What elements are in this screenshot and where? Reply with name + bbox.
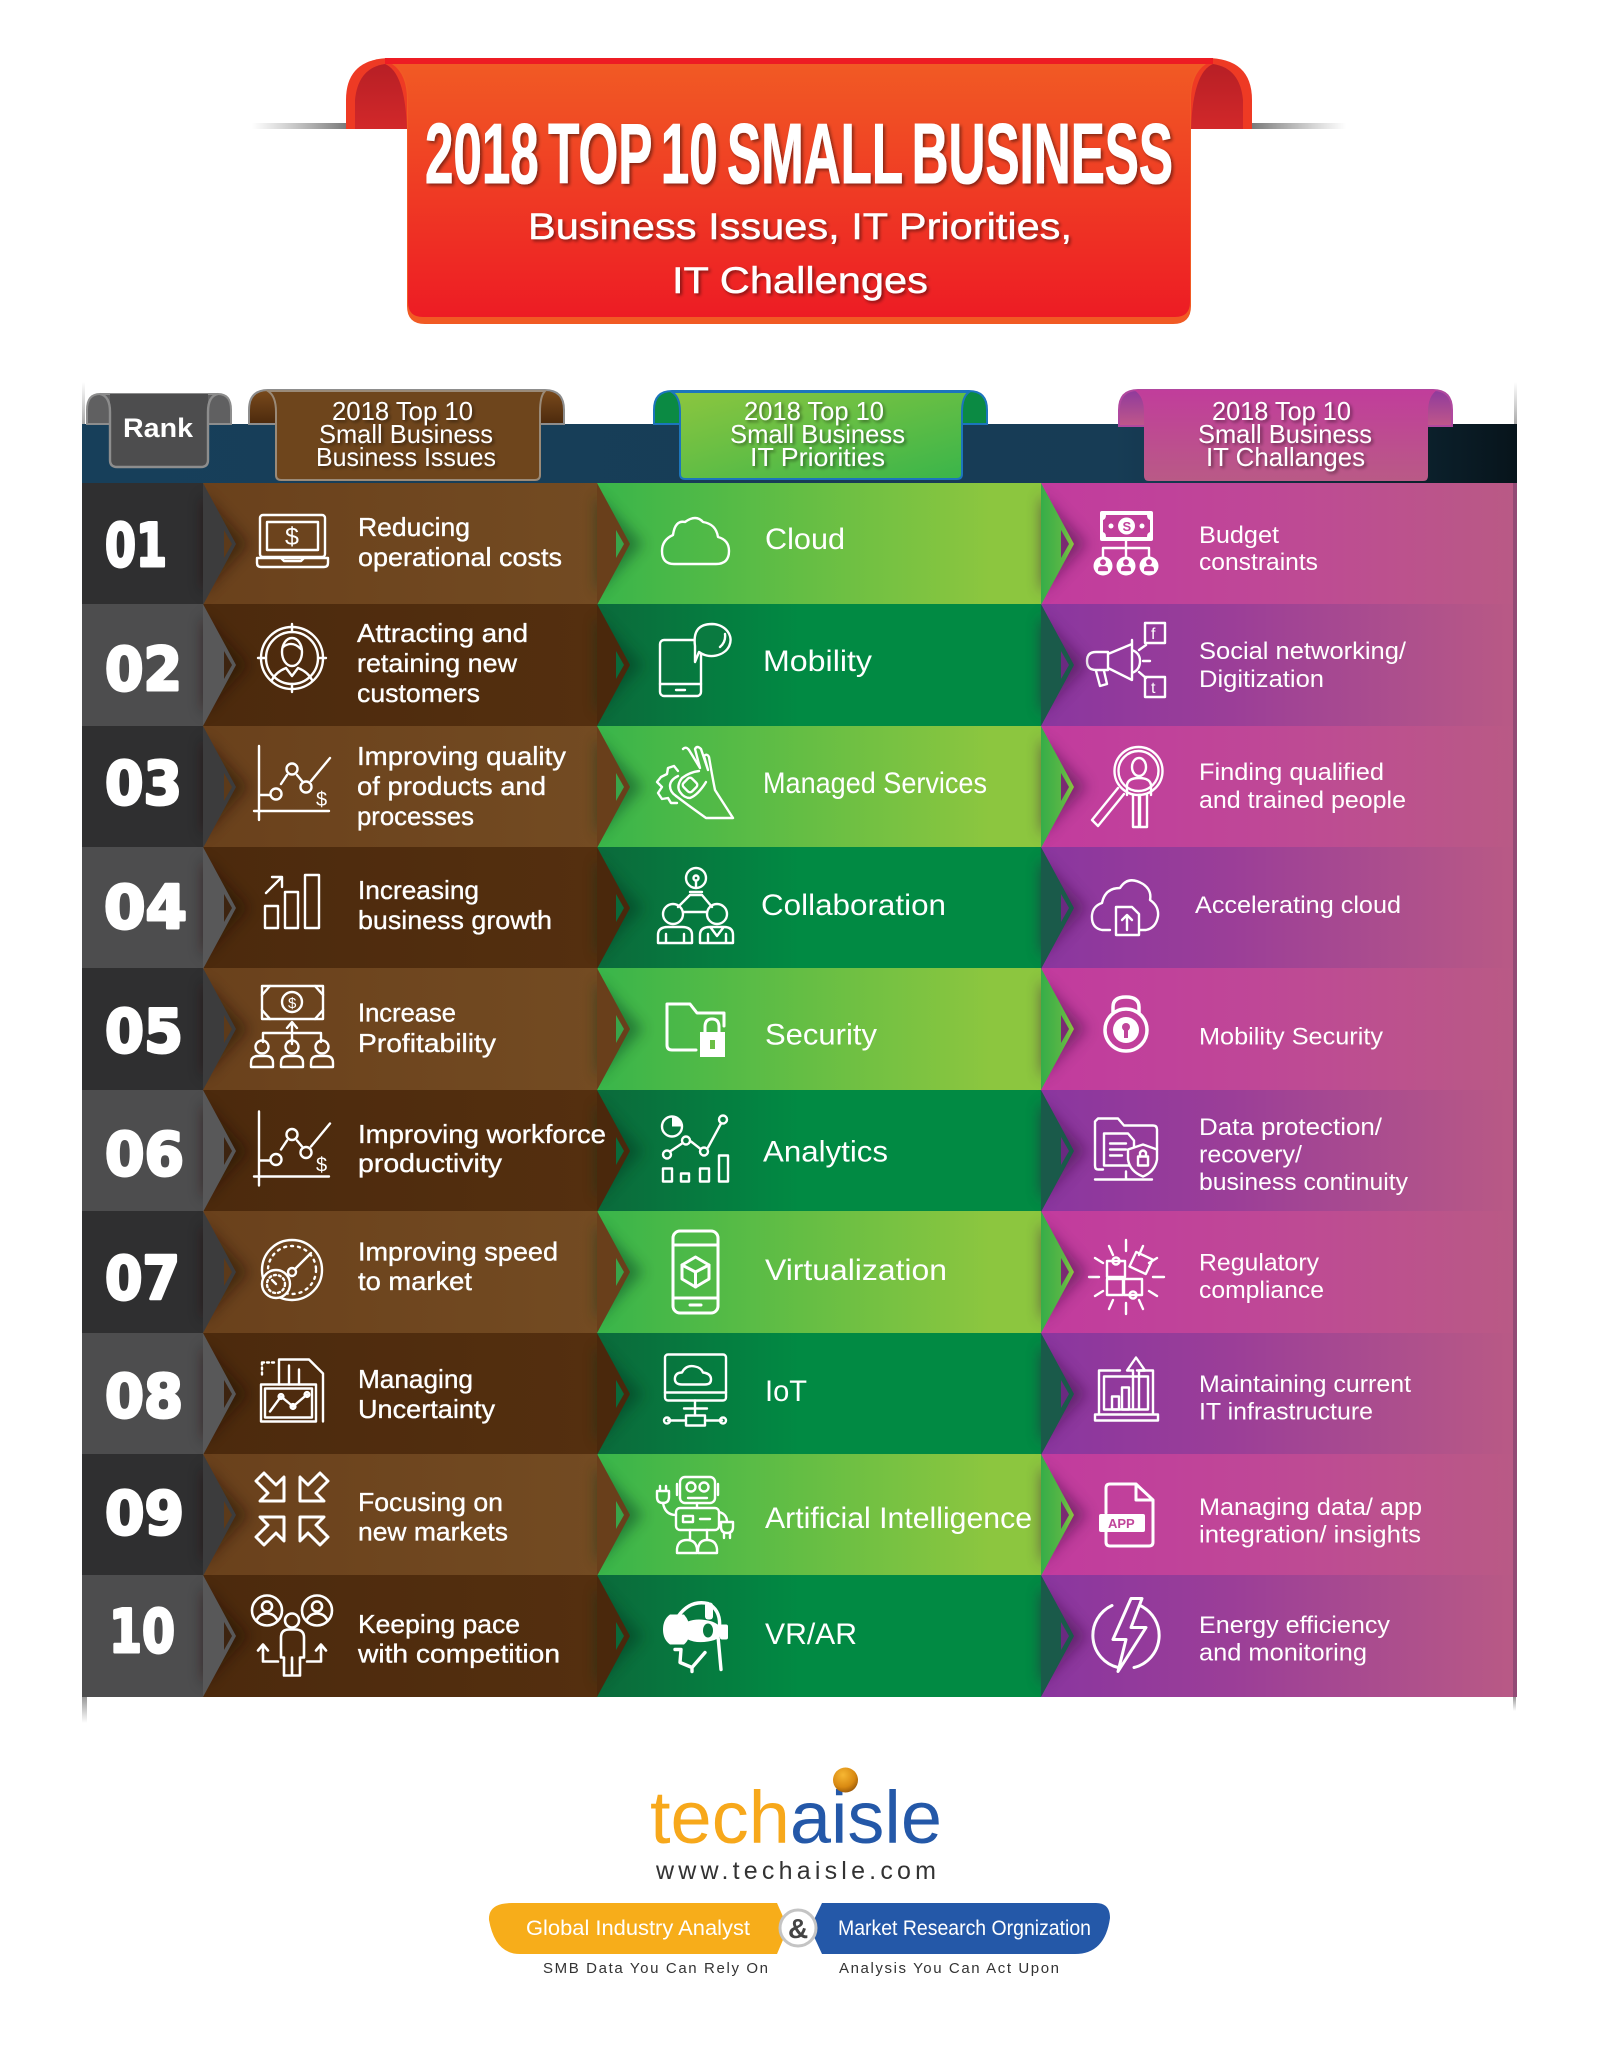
icon: growth bars bbox=[265, 875, 319, 928]
header: IT priorities: 2018 Top 10 bbox=[744, 396, 884, 426]
purple labels: Digitization bbox=[1199, 666, 1324, 693]
brown labels: of products and bbox=[357, 771, 546, 801]
rank numbers: 06 bbox=[105, 1120, 184, 1190]
icon: line chart dollar bbox=[254, 746, 330, 820]
brown labels: Attracting and bbox=[357, 618, 528, 648]
icon: workforce chart: $ bbox=[316, 1154, 327, 1176]
icon: energy bolt bbox=[1093, 1598, 1159, 1672]
rank numbers: 03 bbox=[105, 749, 182, 819]
footer: tagline pills bbox=[489, 1903, 1110, 1977]
rank numbers: 07 bbox=[105, 1244, 180, 1314]
purple labels: and monitoring bbox=[1199, 1640, 1367, 1666]
brown labels: Keeping pace bbox=[358, 1609, 520, 1639]
rank numbers: 01 bbox=[105, 511, 167, 581]
purple labels: business continuity bbox=[1199, 1169, 1408, 1196]
icon: folder with lock bbox=[667, 1004, 725, 1057]
header: IT priorities bbox=[654, 391, 987, 479]
icon: budget org chart: S bbox=[1122, 519, 1132, 534]
icon: virtual phone bbox=[673, 1231, 718, 1313]
icon: collaboration bbox=[658, 868, 733, 943]
purple labels: Budget bbox=[1199, 522, 1279, 549]
brown labels: Uncertainty bbox=[358, 1394, 495, 1424]
footer: tagline pills: Analysis You Can Act Upon bbox=[839, 1960, 1059, 1977]
green labels: Managed Services bbox=[763, 767, 987, 800]
icon: megaphone social: t bbox=[1151, 680, 1156, 697]
title banner bbox=[252, 58, 1346, 324]
icon: robot bbox=[657, 1477, 733, 1553]
icon: target customer bbox=[258, 624, 326, 692]
header: business issues: 2018 Top 10 bbox=[332, 396, 473, 426]
green labels: IoT bbox=[765, 1375, 807, 1408]
title text: Business Issues, IT Priorities, bbox=[528, 206, 1072, 247]
brown labels: Increasing bbox=[358, 875, 479, 905]
rank numbers: 02 bbox=[105, 635, 182, 705]
brown labels: processes bbox=[357, 801, 474, 831]
icon: orange ball bbox=[833, 1768, 858, 1792]
icon: laptop chart bbox=[1095, 1358, 1158, 1420]
icon: iot monitor bbox=[664, 1354, 726, 1426]
brown labels: retaining new bbox=[357, 648, 517, 678]
footer: tagline pills: Global Industry Analyst bbox=[526, 1917, 750, 1940]
purple labels: Accelerating cloud bbox=[1195, 892, 1401, 919]
brown labels: Focusing on bbox=[358, 1487, 503, 1517]
purple labels: integration/ insights bbox=[1199, 1522, 1421, 1548]
brown labels: operational costs bbox=[358, 542, 562, 572]
brown labels: Profitability bbox=[358, 1028, 496, 1058]
purple labels: IT infrastructure bbox=[1199, 1398, 1373, 1426]
brown labels: new markets bbox=[358, 1516, 508, 1546]
header: rank: Rank bbox=[123, 413, 194, 443]
purple labels: compliance bbox=[1199, 1277, 1324, 1304]
icon: laptop dollar bbox=[257, 515, 328, 567]
purple labels: Finding qualified bbox=[1199, 759, 1384, 786]
purple labels: recovery/ bbox=[1199, 1142, 1302, 1168]
green labels: Cloud bbox=[765, 523, 845, 556]
header: business issues: Business Issues bbox=[316, 442, 496, 472]
website: www.techaisle.com bbox=[655, 1857, 936, 1885]
brown labels: with competition bbox=[357, 1638, 560, 1668]
purple labels: Energy efficiency bbox=[1199, 1612, 1390, 1639]
purple labels: Social networking/ bbox=[1199, 638, 1406, 665]
green labels: Security bbox=[765, 1018, 877, 1052]
purple labels: Mobility Security bbox=[1199, 1024, 1383, 1050]
brown labels: customers bbox=[357, 678, 480, 708]
green labels: Artificial Intelligence bbox=[765, 1502, 1032, 1535]
icon: megaphone social bbox=[1087, 623, 1165, 697]
green labels: Collaboration bbox=[761, 889, 946, 922]
brown labels: Reducing bbox=[358, 512, 470, 542]
icon: budget org chart bbox=[1094, 511, 1158, 576]
header: IT challenges: Small Business bbox=[1198, 419, 1372, 449]
footer: tagline pills: SMB Data You Can Rely On bbox=[543, 1960, 768, 1977]
icon: hand and gear bbox=[657, 747, 733, 818]
purple labels: Regulatory bbox=[1199, 1250, 1319, 1276]
icon: laptop dollar: $ bbox=[285, 523, 299, 551]
table edge shadows bbox=[82, 382, 1517, 1723]
header: IT challenges: IT Challanges bbox=[1206, 442, 1365, 472]
icon: analytics bbox=[662, 1116, 728, 1182]
chevrons into brown bbox=[203, 483, 249, 1697]
header: IT challenges: 2018 Top 10 bbox=[1212, 396, 1351, 426]
header: business issues: Small Business bbox=[319, 419, 493, 449]
green labels: Analytics bbox=[763, 1136, 888, 1168]
rank numbers: 09 bbox=[105, 1479, 184, 1549]
green labels: VR/AR bbox=[765, 1618, 857, 1651]
icon: app file bbox=[1099, 1484, 1153, 1546]
icon: cloud upload document bbox=[1092, 880, 1158, 935]
header: IT priorities: Small Business bbox=[730, 419, 905, 449]
icon: magnifier person bbox=[1092, 747, 1162, 827]
icon: speed gauge bbox=[262, 1240, 322, 1300]
icon: phone with speech bubble bbox=[660, 624, 731, 696]
brown labels: productivity bbox=[358, 1148, 502, 1178]
purple labels: Data protection/ bbox=[1199, 1114, 1382, 1141]
footer: techaisle logo: techaisle bbox=[650, 1776, 942, 1859]
green labels: Mobility bbox=[763, 645, 872, 678]
brown labels: to market bbox=[358, 1266, 473, 1296]
purple labels: Maintaining current bbox=[1199, 1371, 1411, 1398]
purple labels: and trained people bbox=[1199, 787, 1406, 814]
brown labels bbox=[357, 512, 606, 1668]
icon: megaphone social: f bbox=[1151, 626, 1156, 643]
brown column: business issues bbox=[203, 483, 643, 1697]
green labels bbox=[761, 523, 1032, 1651]
purple column: IT challenges bbox=[1041, 483, 1517, 1697]
chevrons into green bbox=[597, 483, 643, 1697]
icon: data protection folder bbox=[1095, 1118, 1157, 1180]
icon: line chart dollar: $ bbox=[316, 789, 327, 811]
icon: workforce chart bbox=[254, 1112, 330, 1186]
rank column bbox=[82, 483, 249, 1697]
brown labels: Improving speed bbox=[358, 1236, 558, 1266]
purple labels: Managing data/ app bbox=[1199, 1494, 1422, 1521]
footer: tagline pills: Market Research Orgnization bbox=[838, 1917, 1091, 1940]
rank numbers: 08 bbox=[105, 1362, 183, 1432]
purple labels bbox=[1195, 522, 1422, 1666]
brown labels: Improving quality bbox=[357, 741, 566, 771]
header: IT challenges bbox=[1119, 390, 1452, 481]
footer: tagline pills: & bbox=[788, 1913, 808, 1944]
header: IT priorities: IT Priorities bbox=[750, 442, 885, 472]
icon: arrows inward bbox=[256, 1473, 328, 1545]
icon: padlock bbox=[1105, 997, 1147, 1051]
rank numbers: 04 bbox=[104, 873, 187, 943]
brown labels: Managing bbox=[358, 1364, 473, 1394]
icon: cloud bbox=[662, 518, 729, 564]
icon: competing people bbox=[252, 1596, 332, 1676]
icon: money and team bbox=[251, 986, 333, 1067]
icon: VR headset bbox=[663, 1602, 728, 1672]
icon: money and team: $ bbox=[288, 995, 297, 1012]
chevrons into purple bbox=[1041, 483, 1087, 1697]
header: business issues bbox=[249, 390, 564, 480]
header band bbox=[82, 424, 1517, 483]
rank numbers: 10 bbox=[109, 1597, 175, 1667]
green labels: Virtualization bbox=[765, 1254, 947, 1287]
brown labels: Increase bbox=[358, 998, 456, 1028]
icon: documents and chart bbox=[261, 1360, 323, 1422]
title text: IT Challenges bbox=[672, 260, 928, 301]
brown labels: business growth bbox=[358, 905, 552, 935]
title text bbox=[425, 107, 1173, 301]
green column: IT priorities bbox=[597, 483, 1087, 1697]
brown labels: Improving workforce bbox=[358, 1119, 606, 1149]
rank numbers bbox=[104, 511, 187, 1667]
rank numbers: 05 bbox=[105, 997, 183, 1067]
icon: app file: APP bbox=[1108, 1516, 1135, 1531]
header: rank bbox=[87, 394, 231, 467]
purple labels: constraints bbox=[1199, 549, 1318, 576]
icon: puzzle compliance bbox=[1089, 1240, 1164, 1314]
